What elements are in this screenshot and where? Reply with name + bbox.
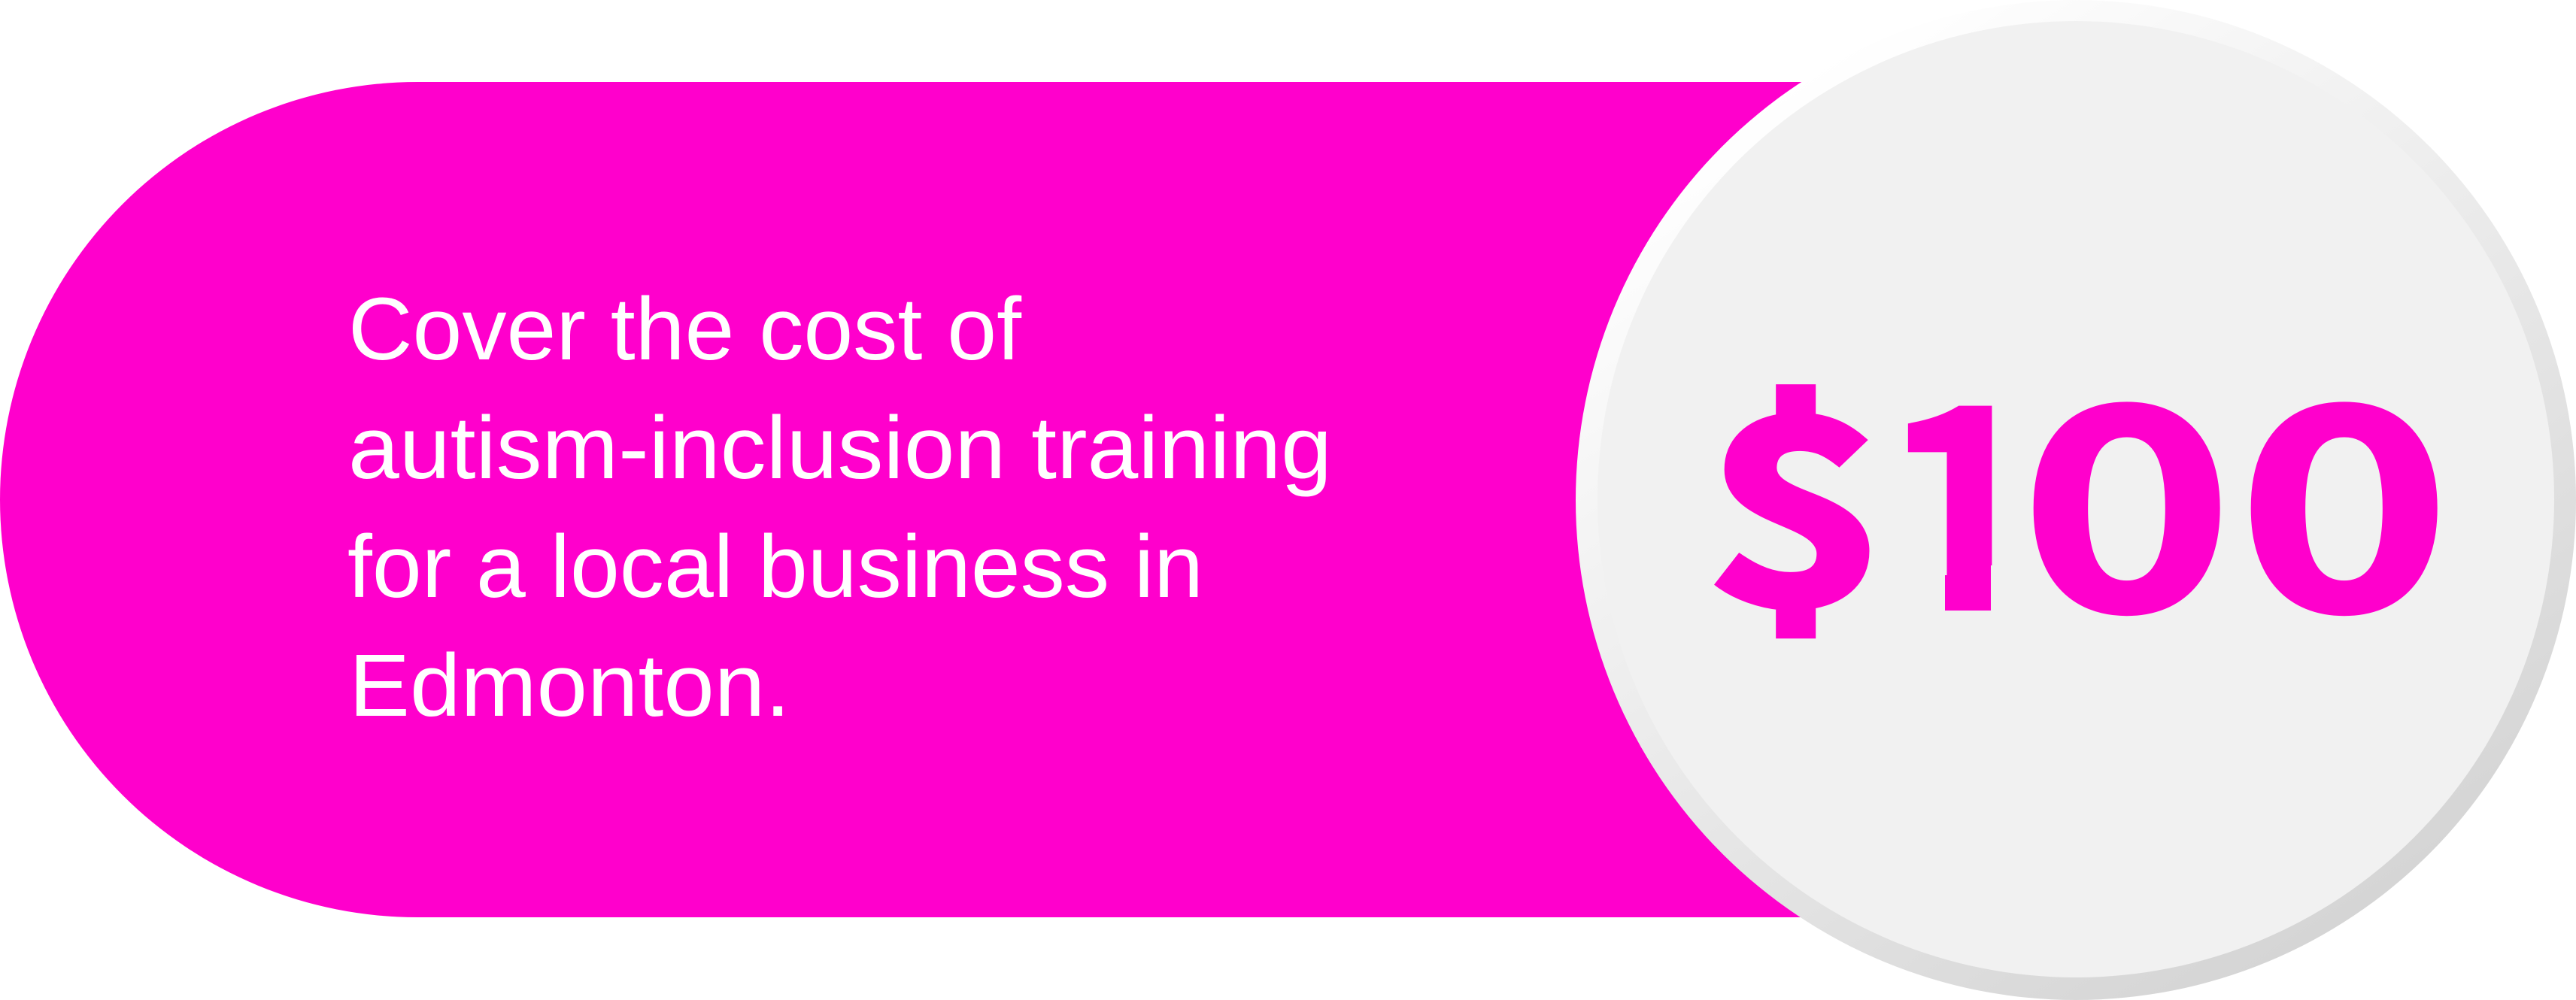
description text: Edmonton. [349, 636, 790, 735]
circle outer ring [1576, 0, 2576, 1000]
badge: amount circle [1576, 0, 2576, 1000]
circle inner disc [1597, 21, 2554, 977]
description text: Cover the cost of [348, 280, 1021, 379]
amount: $100 [1714, 384, 2438, 639]
description text [347, 280, 1332, 735]
amount: $100: 1 [1879, 284, 2049, 692]
amount: $100: $ [1706, 310, 1886, 677]
description text: for a local business in [347, 517, 1203, 617]
amount: $100: 0 [2237, 283, 2451, 692]
amount: $100: 0 [2019, 283, 2234, 692]
description text: autism-inclusion training [348, 398, 1332, 498]
panel: magenta pill [0, 82, 2332, 917]
